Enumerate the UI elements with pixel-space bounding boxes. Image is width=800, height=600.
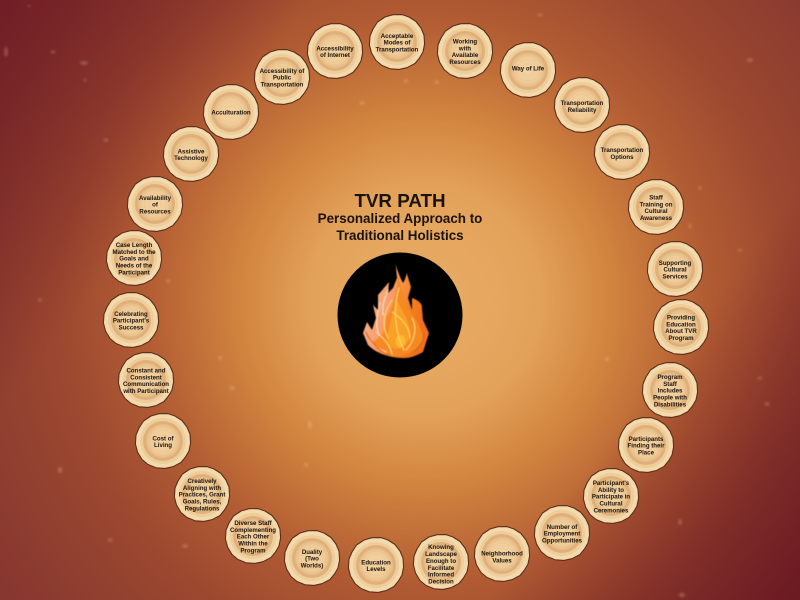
node: Acceptable Modes of Transportation: Acceptable <box>381 33 414 40</box>
node: Number of Employment Opportunities: Number of <box>547 524 578 531</box>
title: TVR PATH <box>354 190 446 211</box>
node: Program Staff Includes People with Disabilities: Staff <box>663 381 678 388</box>
node: Creatively Aligning with Practices, Grant Goals, Rules, Regulations: Goals, Rules, <box>183 499 222 506</box>
node: Acceptable Modes of Transportation: Transportation <box>376 47 419 54</box>
node: Availability of Resources: of <box>152 202 159 209</box>
node: Participant's Ability to Participate in Cultural Ceremonies <box>583 469 639 523</box>
node: Program Staff Includes People with Disabilities: People with <box>653 395 687 402</box>
node: Program Staff Includes People with Disabilities: Disabilities <box>654 402 687 409</box>
node: Providing Education About TVR Program: Providing <box>667 314 695 321</box>
node: Transportation Reliability: Transportation <box>561 100 604 107</box>
node: Participants Finding their Place <box>618 418 674 472</box>
node: Assistive Technology: Assistive <box>178 148 205 155</box>
node: Participant's Ability to Participate in Cultural Ceremonies: Participant's <box>593 480 630 487</box>
node: Accessibility of Internet <box>307 24 363 78</box>
subtitle: Traditional Holistics <box>336 228 464 243</box>
node: Neighborhood Values: Neighborhood <box>481 551 523 558</box>
node: Creatively Aligning with Practices, Grant Goals, Rules, Regulations: Practices, Grant <box>179 492 225 499</box>
node: Duality (Two Worlds) <box>284 531 340 585</box>
node: Transportation Options: Transportation <box>601 147 644 154</box>
node: Knowing Landscape Enough to Facilitate Informed Decision: Landscape <box>425 551 458 558</box>
node: Neighborhood Values <box>474 527 530 581</box>
node: Working with Available Resources: with <box>458 45 471 52</box>
node: Acceptable Modes of Transportation <box>369 15 425 69</box>
node: Constant and Consistent Communication with Participant <box>118 353 174 407</box>
node: Transportation Options <box>594 125 650 179</box>
node: Education Levels <box>348 538 404 592</box>
node: Working with Available Resources: Resources <box>449 59 481 66</box>
node: Way of Life: Way of Life <box>512 66 545 73</box>
node: Cost of Living <box>135 414 191 468</box>
node: Assistive Technology: Technology <box>174 155 208 162</box>
node: Diverse Staff Complementing Each Other Within the Program: Diverse Staff <box>234 520 273 527</box>
node: Acculturation <box>203 85 259 139</box>
node: Supporting Cultural Services: Cultural <box>663 267 687 274</box>
node: Participant's Ability to Participate in Cultural Ceremonies: Participate in <box>592 494 630 501</box>
node: Transportation Reliability <box>554 78 610 132</box>
node: Duality (Two Worlds): (Two <box>305 556 319 563</box>
node: Case Length Matched to the Goals and Needs of the Participant: Participant <box>118 270 150 277</box>
node: Providing Education About TVR Program: Program <box>668 335 694 342</box>
node: Duality (Two Worlds): Worlds) <box>301 563 323 570</box>
node: Diverse Staff Complementing Each Other Within the Program: Within the <box>238 541 268 548</box>
node: Availability of Resources <box>127 177 183 231</box>
node: Case Length Matched to the Goals and Needs of the Participant: Needs of the <box>116 263 153 270</box>
node: Cost of Living: Cost of <box>152 435 174 442</box>
node: Supporting Cultural Services <box>647 242 703 296</box>
node: Accessibility of Public Transportation: Transportation <box>261 82 304 89</box>
node: Celebrating Participant's Success <box>103 293 159 347</box>
node: Accessibility of Public Transportation: Public <box>273 75 292 82</box>
node: Availability of Resources: Availability <box>139 195 172 202</box>
node: Knowing Landscape Enough to Facilitate Informed Decision: Facilitate <box>428 565 455 572</box>
icon: fire in black circle <box>338 252 462 378</box>
node: Knowing Landscape Enough to Facilitate Informed Decision <box>413 535 469 589</box>
node: Constant and Consistent Communication with Participant: with Participant <box>122 388 169 395</box>
node: Program Staff Includes People with Disabilities: Program <box>657 374 683 381</box>
node: Diverse Staff Complementing Each Other Within the Program: Each Other <box>237 534 270 541</box>
node: Accessibility of Public Transportation: Accessibility of <box>260 68 305 75</box>
node: Acceptable Modes of Transportation: Modes of <box>384 40 411 47</box>
node: Participant's Ability to Participate in Cultural Ceremonies: Ability to <box>598 487 624 494</box>
node: Participants Finding their Place: Participants <box>629 436 664 443</box>
node: Supporting Cultural Services: Services <box>662 274 688 281</box>
node: Number of Employment Opportunities: Opportunities <box>542 538 583 545</box>
node: Staff Training on Cultural Awareness <box>628 180 684 234</box>
node: Program Staff Includes People with Disabilities <box>642 363 698 417</box>
node: Case Length Matched to the Goals and Needs of the Participant: Goals and <box>119 256 149 263</box>
node: Constant and Consistent Communication with Participant: Communication <box>123 381 169 388</box>
node: Diverse Staff Complementing Each Other Within the Program: Complementing <box>230 527 276 534</box>
node: Number of Employment Opportunities <box>534 506 590 560</box>
node: Celebrating Participant's Success: Celebrating <box>114 311 148 318</box>
node: Participant's Ability to Participate in Cultural Ceremonies: Ceremonies <box>594 508 629 515</box>
node: Knowing Landscape Enough to Facilitate Informed Decision: Enough to <box>426 558 456 565</box>
node: Creatively Aligning with Practices, Grant Goals, Rules, Regulations: Aligning with <box>183 485 221 492</box>
node: Working with Available Resources <box>437 24 493 78</box>
node: Knowing Landscape Enough to Facilitate Informed Decision: Informed <box>428 572 454 579</box>
node: Staff Training on Cultural Awareness: Cultural <box>644 208 668 215</box>
node: Working with Available Resources: Working <box>453 38 477 45</box>
node: Staff Training on Cultural Awareness: Staff <box>649 194 664 201</box>
node: Knowing Landscape Enough to Facilitate Informed Decision: Decision <box>428 579 454 586</box>
node: Participant's Ability to Participate in Cultural Ceremonies: Cultural <box>599 501 623 508</box>
node: Providing Education About TVR Program: Education <box>666 321 696 328</box>
node: Providing Education About TVR Program <box>653 300 709 354</box>
node: Staff Training on Cultural Awareness: Training on <box>640 201 673 208</box>
node: Knowing Landscape Enough to Facilitate Informed Decision: Knowing <box>428 544 454 551</box>
node: Providing Education About TVR Program: About TVR <box>665 328 697 335</box>
node: Staff Training on Cultural Awareness: Awareness <box>640 215 673 222</box>
node: Program Staff Includes People with Disabilities: Includes <box>658 388 683 395</box>
node: Celebrating Participant's Success: Success <box>119 325 144 332</box>
node: Participants Finding their Place: Finding their <box>628 443 665 450</box>
node: Participants Finding their Place: Place <box>638 450 655 457</box>
node: Accessibility of Public Transportation <box>254 50 310 104</box>
node: Duality (Two Worlds): Duality <box>302 549 323 556</box>
node: Transportation Reliability: Reliability <box>568 107 597 114</box>
node: Creatively Aligning with Practices, Grant Goals, Rules, Regulations <box>174 467 230 521</box>
node: Availability of Resources: Resources <box>139 209 171 216</box>
node: Number of Employment Opportunities: Employment <box>544 531 580 538</box>
node: Education Levels: Levels <box>367 566 386 573</box>
node: Case Length Matched to the Goals and Needs of the Participant: Case Length <box>116 242 153 249</box>
node: Diverse Staff Complementing Each Other Within the Program: Program <box>240 548 266 555</box>
node: Accessibility of Internet: Accessibility <box>316 45 354 52</box>
node: Constant and Consistent Communication with Participant: Constant and <box>127 367 166 374</box>
node: Constant and Consistent Communication with Participant: Consistent <box>130 374 162 381</box>
node: Diverse Staff Complementing Each Other Within the Program <box>225 509 281 563</box>
node: Celebrating Participant's Success: Participant's <box>113 318 150 325</box>
node: Way of Life <box>500 43 556 97</box>
node: Creatively Aligning with Practices, Grant Goals, Rules, Regulations: Creatively <box>187 478 217 485</box>
nodes ring <box>103 15 709 592</box>
node: Case Length Matched to the Goals and Needs of the Participant <box>106 231 162 285</box>
node: Education Levels: Education <box>361 559 391 566</box>
node: Accessibility of Internet: of Internet <box>320 52 350 59</box>
node: Supporting Cultural Services: Supporting <box>659 260 692 267</box>
subtitle: Personalized Approach to <box>318 211 482 226</box>
node: Assistive Technology <box>163 127 219 181</box>
node: Working with Available Resources: Available <box>452 52 479 59</box>
node: Creatively Aligning with Practices, Grant Goals, Rules, Regulations: Regulations <box>185 506 220 513</box>
node: Acculturation: Acculturation <box>211 110 251 117</box>
node: Case Length Matched to the Goals and Needs of the Participant: Matched to the <box>112 249 156 256</box>
node: Cost of Living: Living <box>154 442 172 449</box>
node: Neighborhood Values: Values <box>492 558 512 564</box>
node: Transportation Options: Options <box>610 154 634 161</box>
